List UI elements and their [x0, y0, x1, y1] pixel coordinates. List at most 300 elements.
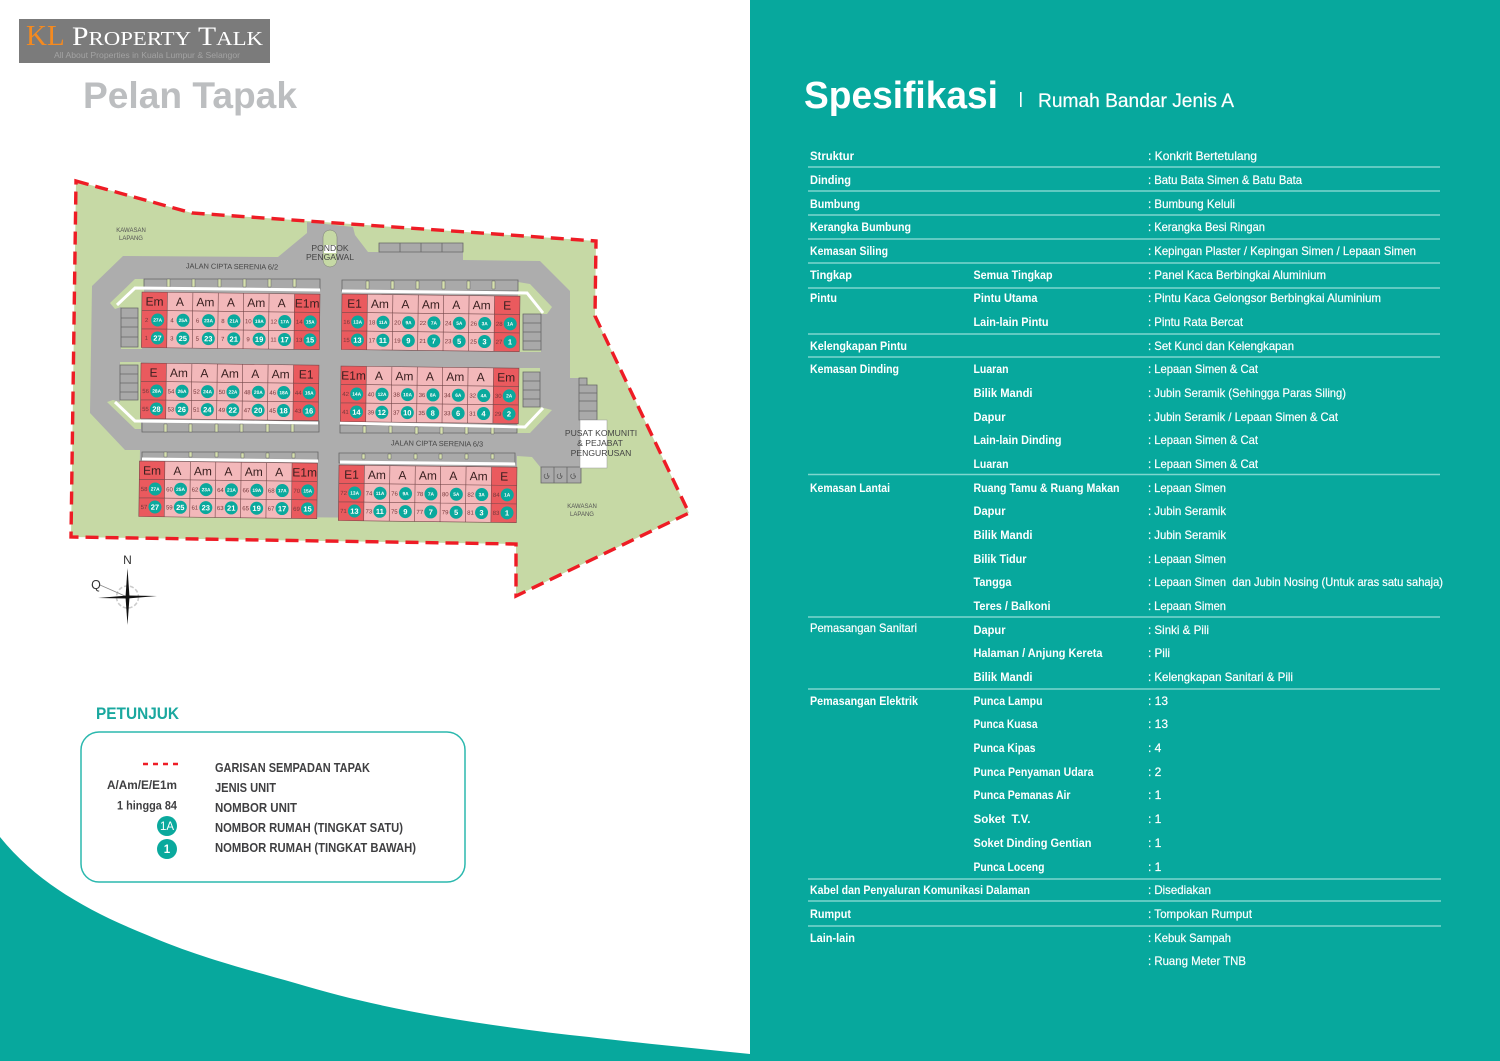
road network: [90, 222, 581, 519]
unit block 2 (units 15-28): 21: [419, 339, 427, 345]
unit block 3 (units 43-56): [140, 363, 319, 421]
unit block 6 (units 71-84): 11A: [376, 491, 385, 497]
table: value column: : Set Kunci dan Kelengkapan: [1148, 339, 1294, 353]
unit block 6 (units 71-84): A: [398, 468, 407, 482]
table: item column: Punca Penyaman Udara: [974, 765, 1094, 779]
unit block 1 (units 1-14): A: [227, 296, 235, 310]
table: item column: Soket T.V.: [974, 812, 1030, 826]
unit block 2 (units 15-28): E: [503, 298, 511, 313]
table: value column: : Konkrit Bertetulang: [1148, 149, 1257, 163]
unit block 1 (units 1-14): 23: [204, 334, 213, 343]
unit block 2 (units 15-28): 7A: [431, 321, 438, 327]
unit block 5 (units 57-70): 61: [191, 506, 199, 512]
unit block 2 (units 15-28): 1: [508, 338, 512, 347]
background: white left page: [0, 0, 750, 1061]
unit block 3 (units 43-56): 18A: [279, 390, 289, 396]
entrance island: [323, 230, 337, 267]
unit block 3 (units 43-56): 18: [279, 406, 288, 415]
unit block 2 (units 15-28): 25: [470, 340, 478, 346]
unit block 5 (units 57-70): 21: [227, 504, 235, 513]
unit block 3 (units 43-56): A: [251, 367, 259, 381]
table: value column: : Disediakan: [1148, 883, 1211, 897]
table: value column: : Lepaan Simen & Cat: [1148, 433, 1259, 447]
unit block 1 (units 1-14): 17A: [280, 319, 290, 325]
logo: KL Property Talk: PROPERTY TALK: [72, 22, 264, 51]
landscaping and parking: block 4: [340, 368, 552, 434]
unit block 5 (units 57-70): 68: [268, 489, 275, 495]
unit block 5 (units 57-70): 23: [202, 503, 210, 512]
unit block 6 (units 71-84): 5: [454, 508, 458, 517]
unit block 6 (units 71-84): E: [500, 469, 508, 484]
table: category column: [810, 149, 1030, 945]
unit block 6 (units 71-84): Am: [470, 469, 488, 483]
table: value column: : Kebuk Sampah: [1148, 931, 1231, 945]
unit block 1 (units 1-14): 23A: [204, 318, 214, 324]
unit block 2 (units 15-28): 24: [445, 321, 452, 327]
table rules: [808, 167, 1441, 926]
landscaping and parking: block 1: [110, 279, 320, 349]
unit block 2 (units 15-28): 22: [420, 321, 427, 327]
subheading: Rumah Bandar Jenis A: Rumah Bandar Jenis A: [1038, 91, 1234, 112]
unit block 5 (units 57-70): 58: [141, 487, 148, 493]
unit block 3 (units 43-56): 48: [244, 390, 251, 396]
unit block 5 (units 57-70): 27: [151, 503, 159, 512]
table: value column: : Pintu Kaca Gelongsor Berbingkai Aluminium: [1148, 291, 1381, 305]
unit block 2 (units 15-28): Am: [371, 297, 389, 311]
legend: ground floor house number badge: 1: [164, 844, 171, 856]
label: Pusat Komuniti: & PEJABAT: [577, 438, 624, 448]
unit block 2 (units 15-28): 9A: [405, 320, 412, 326]
unit block 2 (units 15-28): 27: [496, 340, 503, 346]
unit block 3 (units 43-56): 26A: [178, 389, 187, 395]
label: Kawasan Lapang north: LAPANG: [119, 236, 143, 242]
table: item column: Tangga: [974, 575, 1012, 589]
unit block 4 (units 29-42): A: [477, 370, 485, 384]
unit block 4 (units 29-42): A: [426, 370, 434, 384]
unit block 6 (units 71-84): 79: [442, 510, 449, 516]
unit block 2 (units 15-28): 3A: [482, 321, 488, 327]
unit block 4 (units 29-42): 38: [393, 393, 401, 399]
unit block 3 (units 43-56): 20A: [254, 390, 263, 396]
legend: upper floor house number badge: [157, 816, 177, 836]
table: item column: Punca Lampu: [974, 694, 1042, 708]
unit block 3 (units 43-56): Am: [170, 366, 188, 380]
unit block 5 (units 57-70): E1m: [292, 465, 317, 480]
unit block 1 (units 1-14): 27A: [153, 318, 163, 324]
unit block 6 (units 71-84): 80: [442, 492, 449, 498]
table: item column: Halaman / Anjung Kereta: [974, 646, 1103, 660]
unit block 5 (units 57-70): 23A: [202, 487, 211, 493]
unit block 1 (units 1-14): 3: [170, 336, 174, 342]
unit block 4 (units 29-42): 6A: [455, 393, 462, 399]
unit block 3 (units 43-56): 49: [218, 408, 226, 414]
unit block 6 (units 71-84): 5A: [453, 492, 460, 498]
top parking bays: [379, 243, 463, 252]
table: value column: : Lepaan Simen dan Jubin Nosing (Untuk aras satu sahaja): [1148, 575, 1443, 589]
unit block 5 (units 57-70): 59: [166, 505, 173, 511]
unit block 3 (units 43-56): E1: [299, 367, 314, 382]
unit block 3 (units 43-56): 16: [305, 407, 313, 416]
table: value column: : Batu Bata Simen & Batu Bata: [1148, 173, 1302, 187]
table: value column: : Lepaan Simen: [1148, 481, 1226, 495]
unit block 1 (units 1-14): 25A: [179, 318, 188, 324]
unit block 6 (units 71-84): 73: [365, 509, 373, 515]
table: item column: [974, 268, 1120, 874]
unit block 4 (units 29-42): 6: [456, 409, 460, 418]
table: value column: : Lepaan Simen: [1148, 552, 1226, 566]
unit block 1 (units 1-14): 15: [306, 336, 314, 345]
unit block 1 (units 1-14): E1m: [295, 296, 320, 311]
unit block 3 (units 43-56): 46: [269, 391, 277, 397]
unit block 2 (units 15-28): [341, 294, 520, 352]
table: value column: : Sinki & Pili: [1148, 623, 1209, 637]
unit block 5 (units 57-70): Am: [194, 464, 212, 478]
table: value column: : Kepingan Plaster / Kepingan Simen / Lepaan Simen: [1148, 244, 1416, 258]
label: Jalan Cipta Serenia 6/2: JALAN CIPTA SERENIA 6/2: [186, 261, 278, 272]
table: item column: Bilik Mandi: [974, 386, 1032, 400]
unit block 3 (units 43-56): 45: [269, 409, 277, 415]
unit block 6 (units 71-84): 75: [391, 510, 398, 516]
unit block 3 (units 43-56): 28: [152, 405, 161, 414]
unit block 4 (units 29-42): 4A: [481, 393, 487, 399]
legend: ground floor house number badge: [157, 839, 177, 859]
unit block 2 (units 15-28): 7: [432, 337, 436, 346]
unit block 1 (units 1-14): 11: [270, 338, 277, 344]
unit block 6 (units 71-84): 3: [479, 508, 484, 517]
unit block 1 (units 1-14): 25: [179, 334, 187, 343]
table: category column: Kemasan Dinding: [810, 362, 899, 376]
unit block 4 (units 29-42): 41: [342, 410, 349, 416]
table: value column: : 1: [1148, 836, 1162, 850]
unit block 6 (units 71-84): 84: [493, 493, 500, 499]
unit block 5 (units 57-70): 27A: [151, 487, 160, 493]
unit block 2 (units 15-28): 19: [394, 339, 401, 345]
unit block 2 (units 15-28): Am: [422, 297, 440, 312]
site land area: [71, 181, 689, 596]
unit block 5 (units 57-70): 60: [166, 487, 174, 493]
table: item column: Teres / Balkoni: [974, 599, 1050, 613]
unit block 6 (units 71-84): 11: [376, 507, 384, 516]
label: Kawasan Lapang south: LAPANG: [570, 512, 594, 518]
unit block 4 (units 29-42): 10A: [403, 392, 413, 398]
unit block 1 (units 1-14): 7: [221, 337, 225, 343]
unit block 2 (units 15-28): 16: [343, 320, 351, 326]
unit block 6 (units 71-84): E1: [344, 468, 359, 482]
unit block 1 (units 1-14): [141, 292, 320, 350]
unit block 5 (units 57-70): 65: [242, 506, 250, 512]
table: value column: : Kerangka Besi Ringan: [1148, 220, 1265, 234]
unit block 3 (units 43-56): Am: [221, 366, 239, 381]
table: item column: Luaran: [974, 362, 1008, 376]
unit block 4 (units 29-42): 32: [469, 394, 477, 400]
unit block 4 (units 29-42): 14: [352, 408, 361, 417]
unit block 4 (units 29-42): 40: [368, 392, 375, 398]
unit block 1 (units 1-14): Am: [247, 296, 265, 310]
unit block 3 (units 43-56): 50: [219, 390, 226, 396]
table: value column: : Ruang Meter TNB: [1148, 954, 1246, 968]
legend: descriptions: JENIS UNIT: [215, 781, 276, 795]
unit block 3 (units 43-56): 24A: [203, 389, 213, 395]
table: item column: Dapur: [974, 504, 1006, 518]
unit block 1 (units 1-14): 2: [145, 318, 149, 324]
unit block 2 (units 15-28): A: [401, 297, 410, 311]
unit block 4 (units 29-42): 31: [469, 412, 477, 418]
table: value column: : Jubin Seramik / Lepaan Simen & Cat: [1148, 410, 1339, 424]
table: category column: Kerangka Bumbung: [810, 220, 911, 234]
unit block 3 (units 43-56): 22: [229, 406, 237, 415]
unit block 4 (units 29-42): A: [375, 369, 383, 383]
table: item column: Dapur: [974, 623, 1006, 637]
table: item column: Bilik Tidur: [974, 552, 1027, 566]
unit block 6 (units 71-84): 1A: [504, 493, 511, 499]
table: category column: Lain-lain: [810, 931, 855, 945]
unit block 5 (units 57-70): 17: [278, 504, 286, 513]
unit block 5 (units 57-70): 19: [252, 504, 261, 513]
table: item column: Punca Pemanas Air: [974, 788, 1071, 802]
table: value column: : Lepaan Simen & Cat: [1148, 362, 1259, 376]
table: value column: : Pili: [1148, 646, 1170, 660]
unit block 6 (units 71-84): 76: [391, 492, 399, 498]
unit block 1 (units 1-14): Em: [145, 295, 164, 309]
unit block 5 (units 57-70): 19A: [252, 488, 262, 494]
unit block 6 (units 71-84): 77: [416, 510, 424, 516]
table: value column: : Jubin Seramik (Sehingga Paras Siling): [1148, 386, 1346, 400]
site plan: [71, 181, 689, 596]
unit block 3 (units 43-56): 16A: [305, 391, 314, 397]
table: item column: Punca Loceng: [974, 860, 1044, 874]
unit block 3 (units 43-56): 20: [254, 406, 262, 415]
unit block 4 (units 29-42): 42: [342, 392, 350, 398]
table: value column: : Jubin Seramik: [1148, 528, 1227, 542]
table: item column: Dapur: [974, 410, 1006, 424]
unit block 5 (units 57-70): A: [224, 465, 232, 479]
table: category column: Kemasan Lantai: [810, 481, 890, 495]
table: value column: : 13: [1148, 694, 1168, 708]
unit block 2 (units 15-28): Am: [473, 298, 491, 312]
table: value column: : 2: [1148, 765, 1162, 779]
legend: descriptions: [215, 761, 416, 855]
table: category column: Pemasangan Elektrik: [810, 694, 918, 708]
unit block 1 (units 1-14): 1: [145, 336, 149, 342]
unit block 3 (units 43-56): 47: [244, 408, 251, 414]
community centre building: [580, 420, 607, 468]
unit block 4 (units 29-42): [340, 366, 519, 424]
unit block 5 (units 57-70): 17A: [278, 488, 287, 494]
unit block 4 (units 29-42): 8A: [430, 393, 437, 399]
unit block 3 (units 43-56): 52: [193, 390, 201, 396]
table: category column: Bumbung: [810, 197, 860, 211]
unit block 1 (units 1-14): Am: [196, 295, 215, 309]
unit block 4 (units 29-42): 8: [431, 409, 435, 418]
unit block 2 (units 15-28): 17: [368, 338, 376, 344]
unit block 5 (units 57-70): 25A: [176, 487, 186, 493]
unit block 2 (units 15-28): 28: [496, 322, 503, 328]
unit block 2 (units 15-28): 11: [379, 336, 387, 345]
table: category column: Struktur: [810, 149, 854, 163]
label: Kawasan Lapang south: KAWASAN: [567, 504, 597, 510]
unit block 3 (units 43-56): 44: [295, 391, 302, 397]
legend: descriptions: GARISAN SEMPADAN TAPAK: [215, 761, 370, 775]
legend panel: [81, 732, 465, 882]
unit block 3 (units 43-56): 24: [203, 405, 212, 414]
unit block 6 (units 71-84): 9A: [402, 491, 409, 497]
unit block 5 (units 57-70): 70: [293, 489, 301, 495]
unit block 3 (units 43-56): 26: [178, 405, 186, 414]
label: Pusat Komuniti: PENGURUSAN: [571, 448, 631, 458]
unit block 6 (units 71-84): 3A: [479, 492, 485, 498]
unit block 2 (units 15-28): 23: [445, 339, 452, 345]
unit block 4 (units 29-42): 2A: [506, 394, 513, 400]
table: value column: : Kelengkapan Sanitari & Pili: [1148, 670, 1293, 684]
legend: descriptions: NOMBOR UNIT: [215, 801, 297, 815]
unit block 4 (units 29-42): Em: [497, 370, 515, 385]
table: category column: Rumput: [810, 907, 851, 921]
unit block 6 (units 71-84): 7: [429, 508, 433, 517]
unit block 6 (units 71-84): 74: [366, 491, 373, 497]
unit block 5 (units 57-70): 21A: [227, 488, 236, 494]
unit block 2 (units 15-28): 5A: [456, 321, 463, 327]
legend: descriptions: NOMBOR RUMAH (TINGKAT SATU): [215, 821, 403, 835]
unit block 6 (units 71-84): A: [449, 469, 457, 483]
label: Pondok Pengawal: PENGAWAL: [306, 252, 354, 262]
unit block 6 (units 71-84): Am: [368, 468, 386, 482]
table: item column: Lain-lain Dinding: [974, 433, 1062, 447]
unit block 4 (units 29-42): 33: [444, 411, 451, 417]
unit block 4 (units 29-42): 35: [418, 411, 426, 417]
unit block 4 (units 29-42): Am: [395, 369, 414, 383]
unit block 2 (units 15-28): 13: [353, 336, 362, 345]
accessible parking: [541, 467, 581, 483]
unit block 3 (units 43-56): 51: [193, 408, 200, 414]
unit block 5 (units 57-70): A: [275, 465, 283, 479]
unit block 5 (units 57-70): 15A: [303, 489, 313, 495]
unit block 4 (units 29-42): 39: [367, 410, 375, 416]
unit block 3 (units 43-56): Am: [272, 367, 290, 381]
table: value column: : 1: [1148, 788, 1162, 802]
unit block 1 (units 1-14): 15A: [306, 320, 315, 326]
legend: descriptions: NOMBOR RUMAH (TINGKAT BAWAH): [215, 841, 416, 855]
table: category column: Tingkap: [810, 268, 852, 282]
unit block 1 (units 1-14): 19: [255, 335, 263, 344]
unit block 4 (units 29-42): 37: [393, 411, 400, 417]
table: category column: Kelengkapan Pintu: [810, 339, 907, 353]
label: Pusat Komuniti: PUSAT KOMUNITI: [565, 428, 637, 438]
table: value column: : Lepaan Simen & Cat: [1148, 457, 1259, 471]
unit block 2 (units 15-28): A: [452, 298, 460, 312]
table: category column: Kabel dan Penyaluran Komunikasi Dalaman: [810, 883, 1030, 897]
table: category column: Pemasangan Sanitari: [810, 621, 917, 635]
unit block 4 (units 29-42): 14A: [352, 392, 362, 398]
table: value column: : 4: [1148, 741, 1162, 755]
table: value column: : 13: [1148, 717, 1168, 731]
unit block 5 (units 57-70): 69: [293, 507, 301, 513]
table: value column: : Jubin Seramik: [1148, 504, 1227, 518]
unit block 1 (units 1-14): 14: [296, 320, 303, 326]
unit block 4 (units 29-42): 36: [419, 393, 426, 399]
unit block 2 (units 15-28): 13A: [353, 320, 363, 326]
unit block 5 (units 57-70): 66: [242, 488, 250, 494]
logo: KL Property Talk: L: [47, 20, 65, 52]
unit block 6 (units 71-84): 7A: [428, 492, 435, 498]
unit block 4 (units 29-42): 4: [481, 409, 486, 418]
table: item column: Ruang Tamu & Ruang Makan: [974, 481, 1120, 495]
table: value column: : Tompokan Rumput: [1148, 907, 1253, 921]
unit block 6 (units 71-84): 81: [467, 511, 475, 517]
unit block 2 (units 15-28): 9: [406, 336, 410, 345]
table: item column: Pintu Utama: [974, 291, 1038, 305]
landscaping and parking: block 6: [339, 453, 515, 464]
unit block 2 (units 15-28): 1A: [507, 322, 514, 328]
unit block 1 (units 1-14): 21: [230, 335, 238, 344]
icon: compass: N: [123, 553, 132, 567]
unit block 1 (units 1-14): 6: [196, 319, 200, 325]
unit block 4 (units 29-42): 34: [444, 393, 451, 399]
unit block 3 (units 43-56): 43: [295, 409, 302, 415]
unit block 2 (units 15-28): 5: [457, 337, 461, 346]
unit block 2 (units 15-28): 11A: [379, 320, 388, 326]
unit block 1 (units 1-14): 17: [280, 335, 289, 344]
unit block 6 (units 71-84): 83: [493, 511, 500, 517]
site boundary dashed line: [71, 181, 689, 596]
unit block 4 (units 29-42): E1m: [341, 369, 366, 383]
table: item column: Lain-lain Pintu: [974, 315, 1048, 329]
table: item column: Soket Dinding Gentian: [974, 836, 1092, 850]
heading: Spesifikasi: Spesifikasi: [804, 75, 998, 117]
unit block 6 (units 71-84): 82: [467, 493, 475, 499]
unit block 6 (units 71-84): 13: [350, 507, 359, 516]
unit block 5 (units 57-70): 15: [303, 505, 312, 514]
unit block 1 (units 1-14): 12: [270, 320, 278, 326]
unit block 4 (units 29-42): 12: [378, 408, 386, 417]
unit block 2 (units 15-28): 15: [343, 338, 350, 344]
teal curved corner shape: [0, 837, 750, 1061]
unit block 5 (units 57-70): Am: [245, 465, 263, 479]
unit block 1 (units 1-14): 19A: [255, 319, 264, 325]
unit block 4 (units 29-42): 29: [495, 412, 502, 418]
table: value column: : Pintu Rata Bercat: [1148, 315, 1244, 329]
table: item column: Punca Kipas: [974, 741, 1036, 755]
unit block 3 (units 43-56): E: [149, 366, 158, 380]
unit block 6 (units 71-84): 9: [403, 507, 407, 516]
table: value column: : Bumbung Keluli: [1148, 197, 1235, 211]
unit block 1 (units 1-14): 21A: [230, 319, 239, 325]
icon: compass: Q: [91, 578, 101, 592]
unit block 2 (units 15-28): 18: [369, 320, 376, 326]
unit block 1 (units 1-14): 8: [221, 319, 225, 325]
unit block 5 (units 57-70): 63: [217, 506, 224, 512]
unit block 5 (units 57-70): 64: [217, 488, 224, 494]
unit block 4 (units 29-42): 2: [507, 410, 511, 419]
unit block 4 (units 29-42): 12A: [378, 392, 387, 398]
legend: unit number sample: 1 hingga 84: [117, 798, 177, 812]
table: value column: [1148, 149, 1443, 968]
unit block 5 (units 57-70): 57: [141, 505, 148, 511]
unit block 5 (units 57-70): [139, 461, 317, 519]
table: value column: : Panel Kaca Berbingkai Aluminium: [1148, 268, 1326, 282]
legend: upper floor house number badge: 1A: [160, 821, 174, 833]
unit block 5 (units 57-70): 25: [176, 503, 185, 512]
label: Kawasan Lapang north: KAWASAN: [116, 228, 146, 234]
unit block 6 (units 71-84): 72: [340, 491, 348, 497]
unit block 1 (units 1-14): 13: [296, 338, 303, 344]
legend: boundary line sample: [143, 763, 178, 765]
unit block 1 (units 1-14): 5: [196, 337, 200, 343]
heading: Pelan Tapak: Pelan Tapak: [83, 75, 297, 116]
unit block 3 (units 43-56): 28A: [152, 389, 162, 395]
unit block 3 (units 43-56): 54: [168, 389, 175, 395]
table: value column: : 1: [1148, 812, 1162, 826]
unit block 1 (units 1-14): A: [278, 296, 286, 310]
